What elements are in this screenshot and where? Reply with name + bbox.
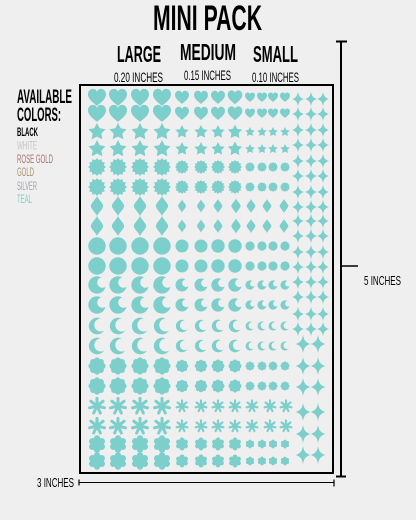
star rows — [88, 123, 290, 156]
available colors legend: COLORS: — [17, 105, 61, 126]
available colors legend: GOLD — [17, 165, 34, 179]
available colors legend: ROSE GOLD — [17, 152, 53, 166]
heading: large size — [114, 41, 163, 85]
heading: medium size: 0.15 INCHES — [184, 68, 231, 83]
asterisk rows — [90, 398, 291, 433]
crescent rows — [89, 318, 289, 354]
moon rows — [88, 276, 290, 314]
heading: small size — [252, 41, 299, 85]
flower rows — [88, 357, 290, 395]
heading: medium size: MEDIUM — [180, 39, 236, 65]
heading: medium size — [180, 39, 236, 83]
title: MINI PACK — [153, 0, 262, 38]
heading: small size: SMALL — [253, 41, 298, 67]
sticker sheet frame — [80, 85, 333, 473]
six-petal rows — [89, 435, 289, 470]
diamond rows — [91, 196, 288, 236]
heading: large size: LARGE — [117, 41, 161, 67]
width label: 3 INCHES — [37, 476, 74, 490]
height ruler — [336, 41, 358, 476]
heading: large size: 0.20 INCHES — [114, 70, 163, 85]
width ruler — [79, 480, 334, 486]
available colors legend: BLACK — [17, 125, 38, 139]
large sparkle column — [296, 335, 325, 464]
available colors legend: SILVER — [17, 179, 37, 193]
four-point sparkle column — [292, 92, 329, 336]
available colors legend — [17, 87, 72, 206]
circle rows — [88, 237, 290, 275]
sticker grid — [88, 89, 329, 470]
available colors legend: TEAL — [17, 192, 32, 206]
heading: small size: 0.10 INCHES — [252, 70, 299, 85]
heart rows — [88, 89, 290, 122]
available colors legend: WHITE — [17, 138, 37, 152]
available colors legend: AVAILABLE — [17, 87, 72, 108]
burst rows — [88, 158, 290, 196]
